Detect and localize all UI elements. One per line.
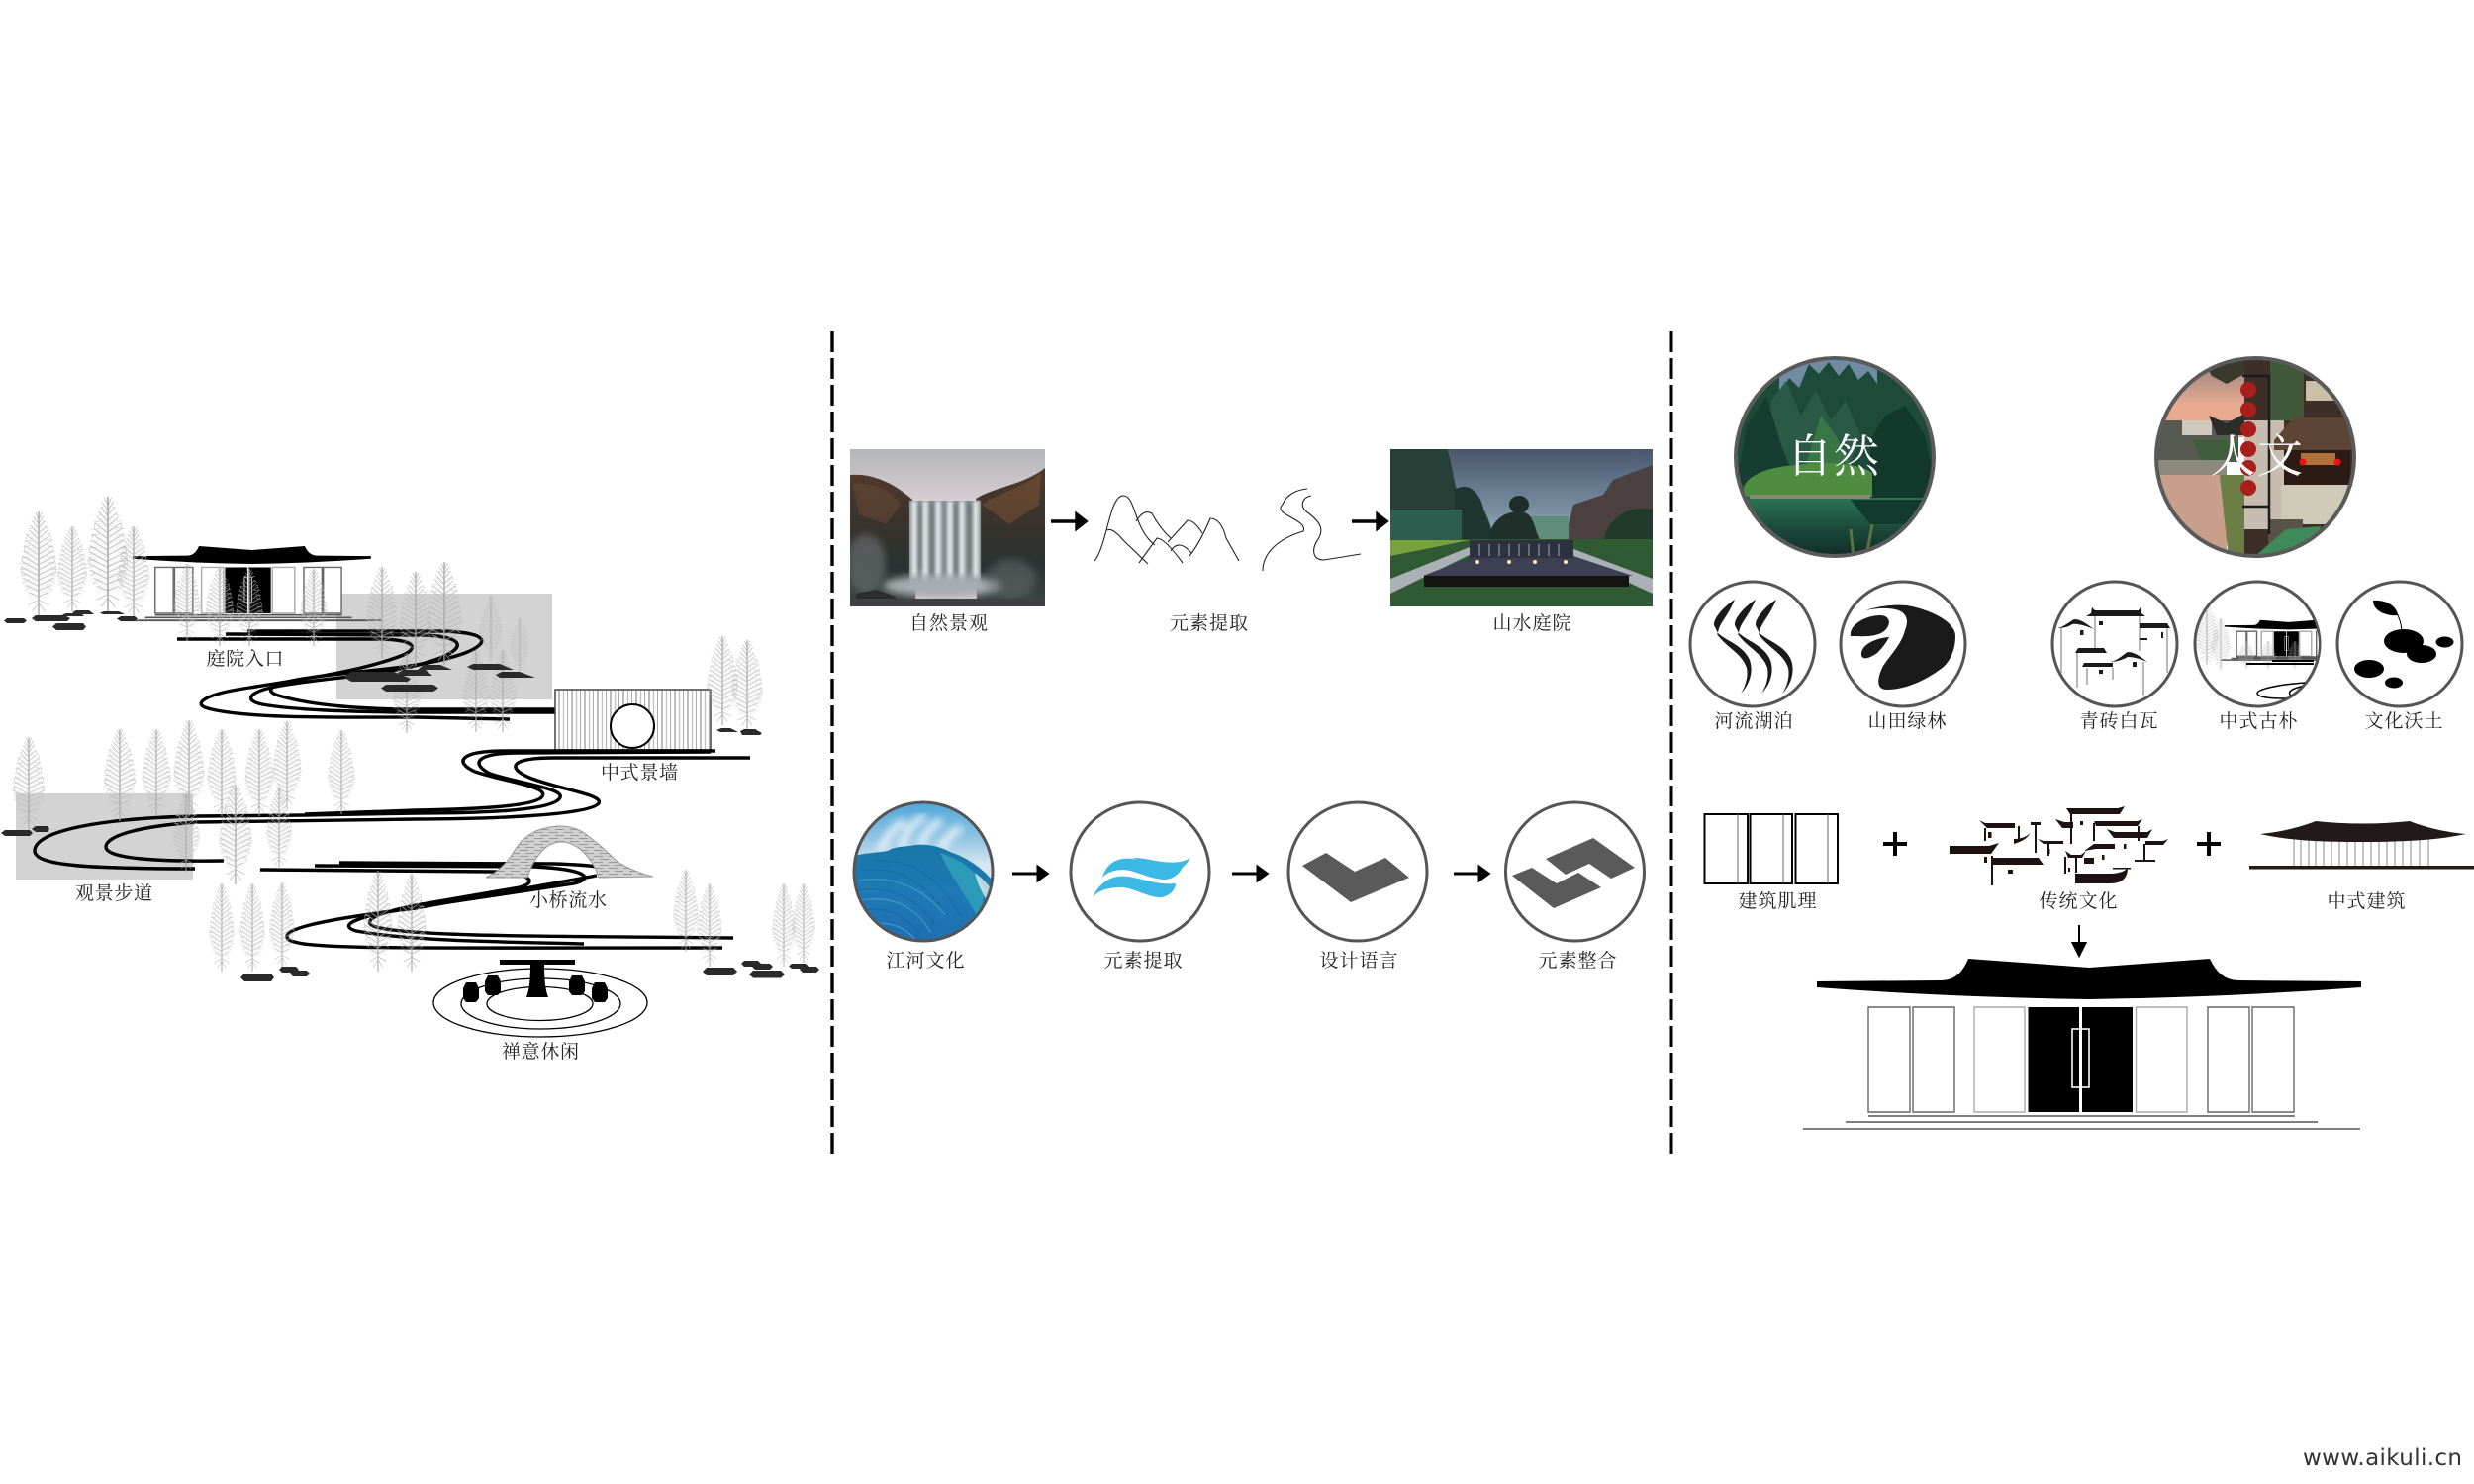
label: zen leisure: 禅意休闲 <box>502 1041 579 1063</box>
photo: landscape courtyard <box>1390 449 1653 606</box>
highlight box: viewing path <box>16 793 193 880</box>
panel: natural landscape extraction <box>846 449 1653 634</box>
river path: middle <box>35 751 750 869</box>
label: element extraction: 元素提取 <box>1104 950 1182 972</box>
panel: river culture to design language <box>851 801 1645 972</box>
label: rivers and lakes: 河流湖泊 <box>1714 710 1793 732</box>
plus sign <box>1883 832 1907 856</box>
icon circle: rivers and lakes <box>1690 582 1815 706</box>
label: cultural soil: 文化沃土 <box>2365 710 2442 732</box>
divider: left dashed line <box>830 331 834 1154</box>
arrow <box>1012 867 1047 881</box>
icon circle: chinese simplicity <box>2193 580 2322 708</box>
panel: nature and humanity <box>1690 358 2462 732</box>
plus sign <box>2197 832 2221 856</box>
building: final hall elevation <box>1803 959 2361 1129</box>
label: small bridge: 小桥流水 <box>529 889 607 911</box>
icon: chinese roof pavilion <box>2249 821 2474 869</box>
label: element integration: 元素整合 <box>1538 950 1617 972</box>
label: chinese architecture: 中式建筑 <box>2328 890 2405 912</box>
label: viewing path: 观景步道 <box>75 882 152 904</box>
ground lines: entrance <box>139 619 382 621</box>
arrow down <box>2072 925 2086 956</box>
watermark: www.aikuli.cn <box>2303 1445 2462 1471</box>
icon: building texture panels <box>1704 814 1838 883</box>
arrow <box>1051 514 1086 528</box>
photo circle: nature <box>1736 358 1940 557</box>
label: courtyard entrance: 庭院入口 <box>206 648 283 670</box>
divider: right dashed line <box>1670 331 1672 1154</box>
arched stone bridge <box>486 826 653 878</box>
river path: lower <box>260 863 733 948</box>
sketch: mountains <box>1094 496 1239 564</box>
label: mountains and forests: 山田绿林 <box>1868 710 1946 732</box>
panel: architecture formula <box>1704 806 2474 1129</box>
arrow <box>1454 867 1488 881</box>
highlight box: entrance courtyard <box>336 594 552 699</box>
icon circle: design language <box>1288 802 1427 941</box>
river path: upper <box>177 631 555 719</box>
panel: landscape route plan <box>1 497 819 1063</box>
zen seating: rings, table and stools <box>433 960 647 1037</box>
label: element extraction: 元素提取 <box>1170 612 1248 634</box>
label: chinese simplicity: 中式古朴 <box>2219 710 2298 732</box>
label: black tiles: 青砖白瓦 <box>2080 710 2157 732</box>
label: mountain water courtyard: 山水庭院 <box>1492 612 1571 634</box>
icon circle: mountains and forests <box>1841 582 1965 706</box>
icon circle: cultural soil <box>2337 582 2462 706</box>
icon: traditional culture rooftops <box>1950 806 2168 885</box>
photo circle: humanity <box>2152 358 2360 564</box>
label: design language: 设计语言 <box>1320 950 1397 972</box>
icon circle: blue waves <box>1071 802 1209 941</box>
trees <box>12 497 815 972</box>
circle title: nature: 自然 <box>1787 431 1880 482</box>
icon circle: element integration <box>1506 802 1645 941</box>
label: traditional culture: 传统文化 <box>2039 890 2118 912</box>
sketch: river lines <box>1263 489 1361 571</box>
label: landscape wall: 中式景墙 <box>601 762 678 784</box>
circle title: humanity: 人文 <box>2211 431 2304 482</box>
label: natural scenery: 自然景观 <box>909 612 988 634</box>
label: river culture: 江河文化 <box>887 950 964 972</box>
arrow <box>1232 867 1267 881</box>
icon circle: black tile houses <box>2052 582 2177 706</box>
stones <box>1 610 819 981</box>
arrow <box>1352 514 1386 528</box>
photo: waterfall <box>846 449 1045 606</box>
photo circle: ocean wave <box>851 801 996 942</box>
landscape wall with moon gate <box>555 690 711 750</box>
building: courtyard entrance hall <box>127 546 371 620</box>
label: building texture: 建筑肌理 <box>1738 890 1817 912</box>
